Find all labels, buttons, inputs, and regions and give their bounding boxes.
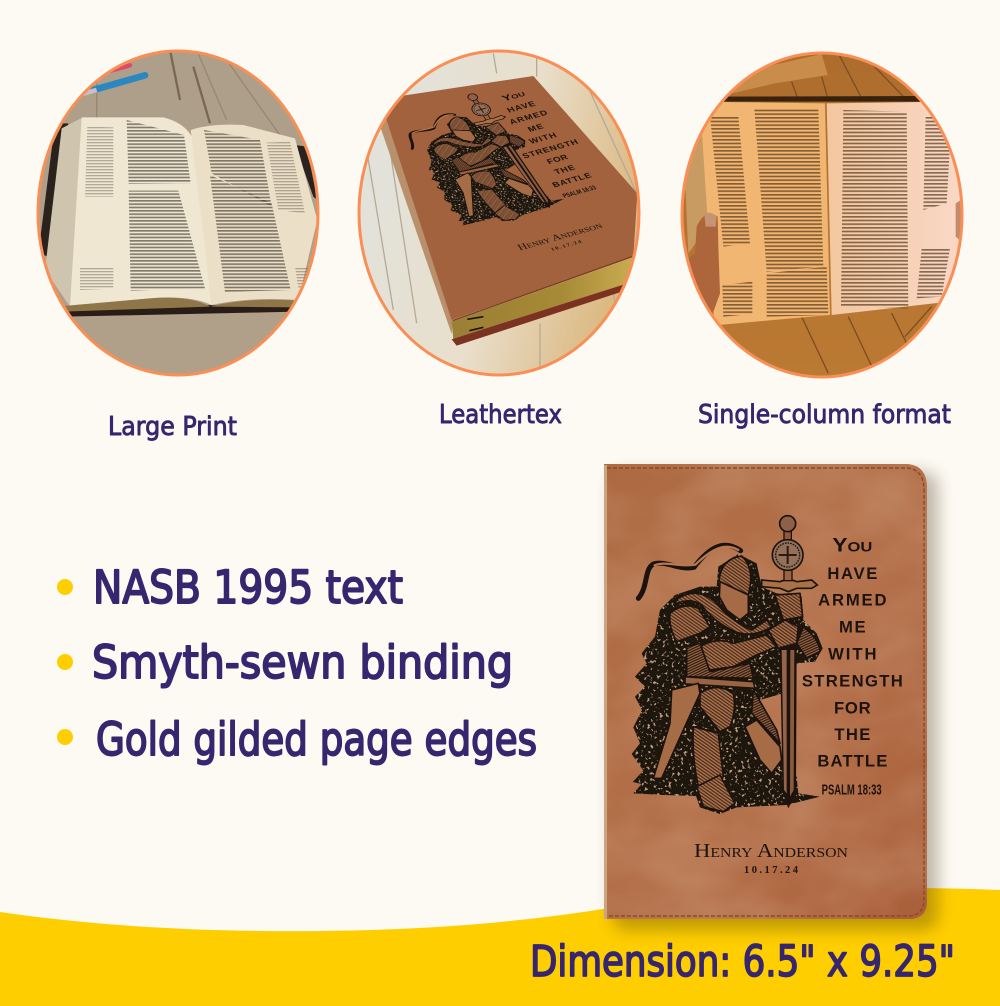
verse text: [802, 536, 903, 798]
verse text: You: [832, 536, 872, 557]
verse text: STRENGTH: [802, 672, 903, 691]
cover artwork in perspective: You: [500, 89, 528, 104]
date: 10.17.24: [744, 865, 799, 876]
bullet: NASB 1995 text: NASB 1995 text: [93, 561, 403, 614]
caption: Single-column format: Single-column format: [698, 400, 951, 430]
verse text: ARMED: [818, 591, 886, 610]
yellow wave footer: [0, 888, 1000, 1006]
verse text: PSALM 18:33: [822, 782, 882, 798]
caption: Leathertex: Leathertex: [439, 400, 562, 430]
photo: leathertex cover on wood: [350, 50, 650, 380]
cover artwork in perspective: ME: [526, 122, 546, 133]
verse text: WITH: [828, 644, 876, 663]
verse text: THE: [834, 725, 870, 744]
verse text: FOR: [834, 698, 871, 717]
cover artwork in perspective: ARMED: [507, 108, 549, 126]
photo: single-column pages held open: [675, 40, 975, 380]
cover artwork in perspective: BATTLE: [550, 171, 593, 189]
verse text: HAVE: [827, 564, 877, 583]
photo: open Bible on wood, large print: [30, 40, 330, 380]
cover artwork in perspective: HAVE: [505, 99, 537, 114]
knight illustration: [632, 516, 823, 814]
feature list: [57, 561, 537, 766]
cover artwork in perspective: FOR: [545, 152, 571, 166]
cover artwork in perspective: STRENGTH: [520, 137, 580, 160]
cover artwork in perspective: WITH: [527, 131, 558, 146]
book shadow: [612, 472, 938, 930]
leather cover: [604, 464, 927, 919]
book cover with knight artwork: [604, 464, 938, 930]
cover artwork in perspective: 10.17.24: [550, 240, 583, 252]
caption: Large Print: Large Print: [108, 412, 237, 442]
cover artwork in perspective: PSALM 18:33: [561, 184, 598, 199]
bullet: Smyth-sewn binding: Smyth-sewn binding: [92, 636, 513, 689]
cover artwork in perspective: Henry Anderson: [515, 221, 605, 253]
owner name: Henry Anderson: [694, 840, 848, 862]
cover artwork in perspective: THE: [552, 163, 577, 176]
verse text: ME: [839, 618, 866, 637]
verse text: BATTLE: [817, 752, 887, 771]
cover artwork in perspective: [408, 92, 602, 251]
bullet: Gold gilded page edges: Gold gilded page edges: [96, 713, 537, 766]
